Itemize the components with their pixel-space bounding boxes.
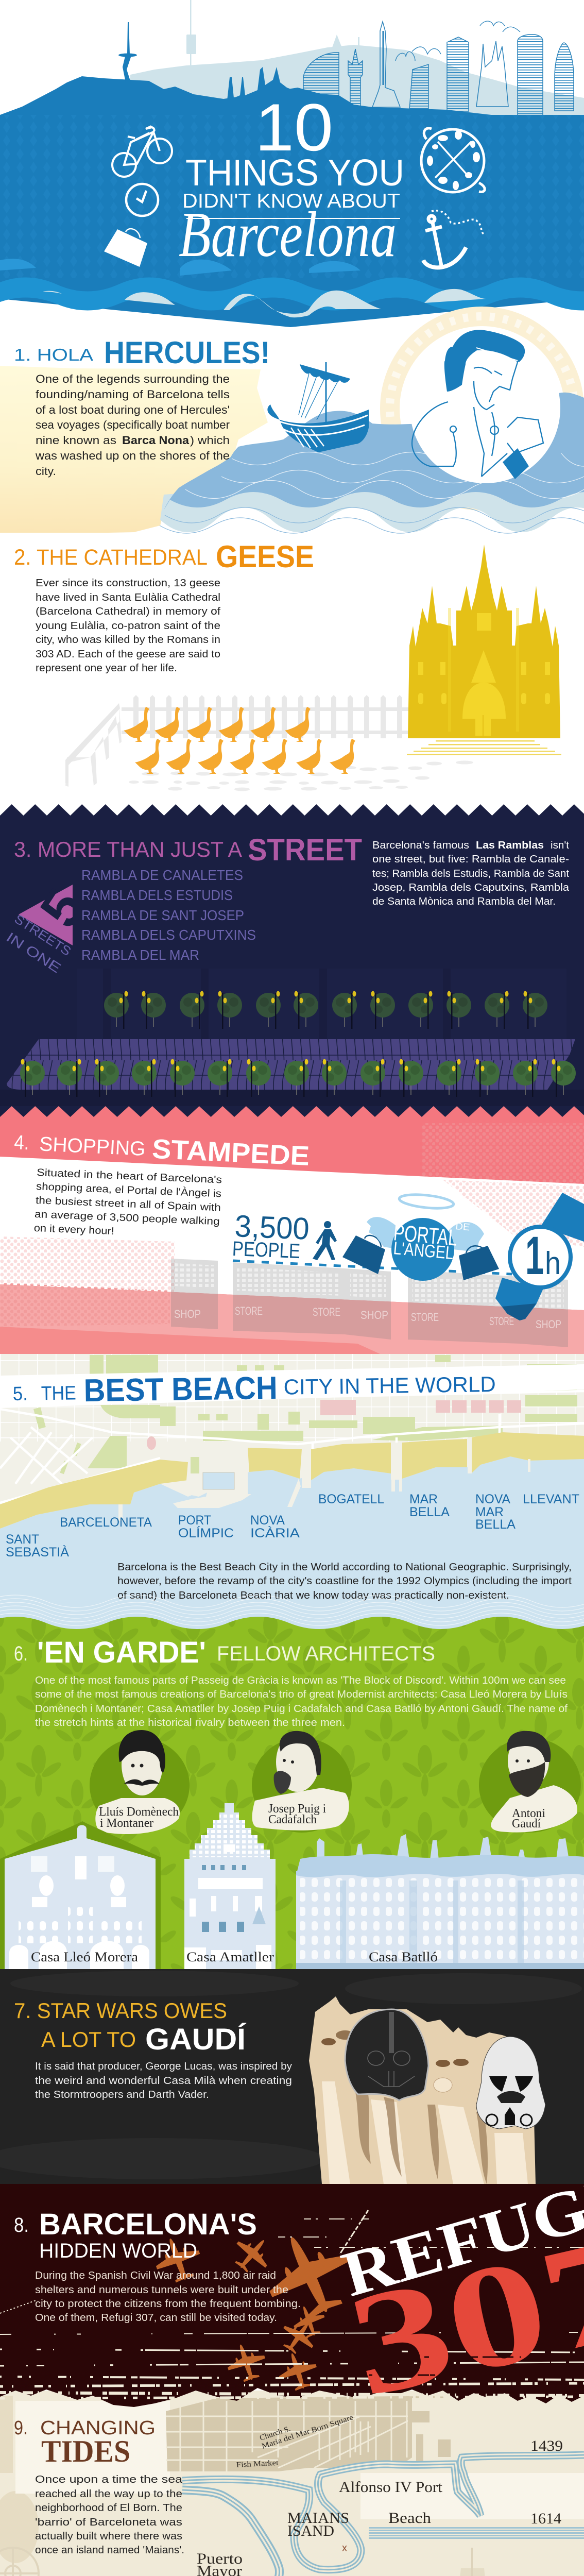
trees and lamps: near row [20,1059,576,1097]
beach labels: BELLA [409,1505,450,1519]
fence [65,695,409,787]
text block: isn't [551,840,569,851]
badge: 5 streets in one: 5 [28,878,97,938]
beaches [0,1432,584,1529]
icon: wristwatch 1h: h [545,1246,561,1281]
badge: 5 streets in one: IN ONE [4,929,64,976]
sand [0,366,268,533]
beach labels [6,1492,579,1560]
text block: once an island named 'Maians'. [35,2545,184,2556]
portrait: Lluís Domènech i Montaner: i Montaner [100,1817,153,1830]
heading: 7. Star Wars owes a lot to Gaudí: 7. STAR WARS OWES [14,1998,227,2023]
list of five ramblas [81,867,256,963]
text block [372,840,570,907]
panel: 1 Hola Hercules [0,316,584,533]
stamp: 307: 307 [335,2203,584,2428]
text block: young Eulàlia, co-patron saint of the [36,620,220,632]
beach labels: SEBASTIÀ [6,1545,69,1560]
shop signs: STORE [313,1306,340,1318]
geese: row of six [124,707,311,742]
map labels: dates and places: 1439 [530,2437,563,2454]
map labels: El Born [236,2413,354,2469]
text block: some of the most famous creations of Barcelona's trio of great Modernist architects: Casa Lleó Morera by Lluís [35,1689,568,1700]
heading: 7. Star Wars owes a lot to Gaudí [14,1998,247,2056]
icon: Greek ship [267,362,369,452]
text block [33,1167,222,1241]
road with railing [0,1039,584,1106]
water [0,1456,584,1649]
heading: 2. The Cathedral Geese: 2. THE CATHEDRAL [14,545,208,570]
cobblestones [129,760,473,791]
map labels: dates and places: Beach [388,2510,431,2527]
heading: 7. Star Wars owes a lot to Gaudí: A LOT TO [41,2027,136,2052]
white disc behind Hercules [410,333,560,483]
halo ring with Greek key [390,316,574,501]
text block: however, before the revamp of the city's coastline for the 1992 Olympics (including the import [117,1575,572,1587]
heading: 9. Changing tides: 9. [14,2417,28,2439]
text block: Barcelona is the Best Beach City in the World according to National Geographic. Surprisingly, [117,1562,572,1573]
shop buildings [171,1259,568,1347]
stamp wear [360,2357,584,2375]
text block [36,578,221,674]
beach labels: SANT [6,1532,39,1547]
title: 10 Things You Didn't Know About Barcelona: Barcelona [179,199,397,270]
heading: 6. En garde fellow architects: FELLOW ARCHITECTS [217,1642,435,1665]
shop upper windows [175,1263,564,1309]
text block [35,372,230,478]
text block: shelters and numerous tunnels were built under the [35,2284,288,2296]
portrait: Antoni Gaudí [479,1731,581,1833]
stat: 3,500 people [232,1209,310,1263]
badge: Portal de l'Àngel [391,1218,470,1281]
map labels: El Born: Maria del Mar [261,2428,311,2451]
street map of El Born [166,2396,451,2471]
grunge scratches [0,2210,584,2398]
portrait: Josep Puig i Cadafalch: Josep Puig i [268,1802,326,1816]
shop signs: STORE [235,1304,263,1317]
panel: 2 Cathedral geese [14,539,561,791]
blue mountain base [0,76,584,327]
text block: de Santa Mònica and Rambla del Mar. [372,896,556,907]
Darth Vader helmet [345,2009,428,2100]
diagonal white band [0,1157,584,1310]
photo illustration: Casa Milà chimneys [309,1996,545,2184]
text block: represent one year of her life. [36,663,177,674]
text block: the stretch hints at the historical rivalry between the three men. [35,1717,345,1728]
text block: of a lost boat during one of Hercules' [36,403,230,416]
list of five ramblas: RAMBLA DE SANT JOSEP [81,907,244,923]
heading: 9. Changing tides [14,2417,156,2468]
skyline: seagulls [396,21,520,61]
text block: Las Ramblas [476,840,544,851]
portrait: Antoni Gaudí: Antoni [512,1807,545,1820]
beach labels: ICÀRIA [250,1526,300,1540]
stat: 3,500 people: 3,500 [234,1209,310,1246]
text block: neighborhood of El Born. The [35,2502,182,2514]
icon: bag left [342,1235,385,1274]
text block: was washed up on the shores of the [35,449,230,462]
beach labels: MAR [409,1492,438,1506]
map labels: dates and places: Alfonso IV Port [339,2479,443,2496]
shop signs: SHOP [536,1318,561,1331]
coastline: 1614 [179,2490,584,2576]
beach labels: NOVA [475,1492,510,1506]
white wave lines over water [0,1595,584,1625]
geese: row of seven [135,739,355,774]
title: 10 Things You Didn't Know About Barcelona: THINGS YOU [185,152,404,194]
waves at the foot of hero [0,259,584,317]
building: Casa Batlló: Casa Batlló [369,1950,438,1964]
heading: 9. Changing tides: CHANGING [40,2417,156,2439]
text block: Ever since its construction, 13 geese [36,578,220,589]
map labels: dates and places [197,2437,564,2576]
icon: anchor with rope [423,211,485,268]
wings and halo [367,1193,484,1252]
heading band: 5. The best beach city in the world: CITY IN THE WORLD [283,1372,496,1399]
panel: 9 Changing tides (drawn beneath torn edge of panel 8) [0,2391,584,2576]
text block: (Barcelona Cathedral) in memory of [36,606,221,617]
map labels: dates and places: Puerto [197,2550,243,2567]
heading: 1. Hola Hercules!: 1. HOLA [14,345,93,364]
building: Casa Lleó Morera: Casa Lleó Morera [31,1950,139,1964]
heading: 6. En garde fellow architects [14,1636,435,1669]
panel: hero header [0,0,584,340]
text block: have lived in Santa Eulàlia Cathedral [36,592,220,603]
shop signs: SHOP [174,1308,201,1320]
heading: 8. Barcelona's hidden world [14,2208,257,2262]
heading: 9. Changing tides: TIDES [41,2434,130,2468]
skyline: outlined buildings [303,22,574,115]
heading: 1. Hola Hercules! [14,335,270,370]
beach labels: PORT [178,1513,211,1528]
text block [35,1675,568,1728]
portrait: Lluís Domènech i Montaner: Lluís Domènech [99,1805,179,1819]
badge: 5 streets in one: STREETS [12,912,74,959]
text block: city. [36,465,56,478]
text block: founding/naming of Barcelona tells [36,388,230,401]
skyline: faint tower and mountain [130,0,584,115]
text block: One of the legends surrounding the [36,372,230,385]
text block [35,2061,292,2100]
title: 10 Things You Didn't Know About Barcelona: DIDN'T KNOW ABOUT [182,190,400,212]
text block: Domènech i Montaner; Casa Amatller by Josep Puig i Cadafalch and Casa Batlló by Antoni Gaudí. The name of [35,1703,568,1715]
text block [35,2270,301,2324]
building: Casa Lleó Morera [0,1821,161,1969]
badge: 5 streets in one [4,878,97,976]
sea waves [160,393,584,533]
wave crests [43,289,486,317]
icon: bicycle [112,126,172,177]
text block: city to protect the citizens from the frequent bombing. [35,2298,301,2310]
faint ship wheel [0,2548,44,2576]
portrait: Josep Puig i Cadafalch [252,1731,352,1833]
heading: 3. More than just a street: STREET [248,833,362,867]
list of five ramblas: RAMBLA DELS CAPUTXINS [81,927,256,943]
heading: 7. Star Wars owes a lot to Gaudí: GAUDÍ [145,2023,247,2056]
icon: wristwatch 1h [495,1193,584,1320]
building: Casa Amatller [184,1803,276,1969]
text block: tes; Rambla dels Estudis, Rambla de Sant [372,868,569,879]
heading: 3. More than just a street [14,833,362,867]
illustration: Barcelona Cathedral [407,545,561,755]
cathedral steps [407,740,561,755]
text block: Barcelona's famous [372,840,469,851]
lower road [0,1284,584,1354]
shop signs [174,1304,561,1331]
panel: 6 En garde fellow architects [0,1595,584,1969]
text block: It is said that producer, George Lucas, was inspired by [35,2061,292,2072]
text block: the Stormtroopers and Darth Vader. [35,2089,209,2100]
text block: of sand) the Barceloneta Beach that we know today was practically non-existent. [117,1590,509,1601]
text block: 303 AD. Each of the geese are said to [36,649,220,660]
text block: shopping area, el Portal de l'Àngel is [36,1180,221,1199]
trees and lamps: far row [104,991,547,1029]
icon: cathedral silhouette [227,67,294,100]
bomber planes [149,2219,365,2395]
beach labels: MAR [475,1505,504,1519]
text block: During the Spanish Civil War around 1,800 air raid [35,2270,276,2281]
text block: nine known as [36,434,116,447]
title: 10 Things You Didn't Know About Barcelona: 10 [255,90,333,165]
heading band: 5. The best beach city in the world: THE [41,1382,76,1404]
shop signs: SHOP [360,1309,388,1321]
map labels: El Born: Church S. [259,2425,291,2443]
coastline: 1439 [182,2455,584,2570]
text block: One of them, Refugi 307, can still be visited today. [35,2312,277,2324]
beach labels: BELLA [475,1517,516,1532]
map roads [0,1391,584,1503]
island treasure mark: x [342,2543,347,2554]
green damask background [0,1617,584,1969]
text block: actually built where there was [35,2531,182,2542]
heading: 1. Hola Hercules!: HERCULES! [104,335,270,370]
shop signs: STORE [489,1315,514,1328]
shop signs: STORE [411,1311,439,1324]
text block: Situated in the heart of Barcelona's [37,1167,222,1185]
panel: 7 Star Wars owes a lot to Gaudí [0,1969,584,2184]
text block [117,1562,572,1601]
badge: Portal de l'Àngel: L'ÀNGEL [392,1238,454,1263]
building: Casa Amatller: Casa Amatller [186,1950,274,1964]
Stormtrooper helmet [476,2037,545,2129]
icon: walking person [313,1221,337,1260]
faint buildings [77,969,566,1041]
beach labels: OLÍMPIC [178,1526,234,1540]
text block: ) which [190,434,230,447]
title: 10 Things You Didn't Know About Barcelona [179,90,404,270]
portrait: Antoni Gaudí: Gaudí [512,1817,541,1831]
text block: Josep, Rambla dels Caputxins, Rambla [372,882,570,893]
text block: city, who was killed by the Romans in [36,634,220,646]
icon: bag right [459,1246,499,1280]
building: Casa Batlló [296,1834,584,1969]
heading band: 5. The best beach city in the world: 5. [13,1383,28,1405]
heading band: 5. The best beach city in the world [0,1364,584,1410]
portrait: Lluís Domènech i Montaner [90,1730,190,1834]
icon: paella [421,128,485,192]
heading: 3. More than just a street: 3. MORE THAN JUST A [14,837,242,861]
portrait: Josep Puig i Cadafalch: Cadafalch [268,1813,317,1826]
text block: one street, but five: Rambla de Canale- [372,854,569,865]
icon: shopping bag [104,229,147,267]
text block: on it every hour! [33,1223,114,1237]
map labels: dates and places: MAIANS [287,2510,349,2527]
heading: 6. En garde fellow architects: 'EN GARDE' [37,1636,206,1669]
heading: 8. Barcelona's hidden world: 8. [14,2214,29,2236]
beach labels: BARCELONETA [60,1515,152,1530]
icon: clock [126,184,158,216]
map labels: dates and places: 1614 [530,2510,561,2527]
beach labels: BOGATELL [318,1492,384,1506]
icon: Collserola tower [118,22,137,82]
text block: 'barrio' of Barceloneta was [35,2517,182,2528]
badge: Portal de l'Àngel: DE [455,1221,470,1233]
heading: 2. The Cathedral Geese [14,539,314,574]
text block [35,2474,184,2556]
heading: 4. Shopping stampede: SHOPPING [39,1133,146,1160]
port and piers [118,1437,530,1521]
heading: 4. Shopping stampede: STAMPEDE [151,1134,310,1172]
heading: 4. Shopping stampede [13,1127,310,1172]
heading: 6. En garde fellow architects: 6. [14,1642,28,1665]
panel: 8 Barcelona's hidden world [0,2165,584,2428]
faint ship [456,2548,489,2576]
list of five ramblas: RAMBLA DELS ESTUDIS [81,887,233,903]
heading band: 5. The best beach city in the world: BEST BEACH [83,1370,278,1409]
text block: Barca Nona [122,434,190,447]
heading: 2. The Cathedral Geese: GEESE [216,539,314,574]
beach labels: LLEVANT [523,1492,579,1506]
text block: an average of 3,500 people walking [35,1209,220,1227]
text block: One of the most famous parts of Passeig de Gràcia is known as 'The Block of Discord'. Within 100m we can see [35,1675,566,1686]
dashed route [233,1261,512,1274]
beach labels: NOVA [250,1513,285,1528]
list of five ramblas: RAMBLA DEL MAR [81,947,199,963]
parchment stains [0,2396,584,2576]
map parks [33,1355,577,1474]
text block: the busiest street in all of Spain with [36,1195,221,1213]
icon: wristwatch 1h: 1 [525,1226,544,1286]
text block: the weird and wonderful Casa Milà when creating [35,2075,292,2087]
badge: Portal de l'Àngel: PORTAL [392,1220,458,1251]
panel: 5 Best beach city map [0,1354,584,1649]
map pink plots [147,1400,521,1450]
stat: 3,500 people: PEOPLE [232,1238,301,1263]
map labels: El Born: Born Square [310,2413,354,2435]
heading: 8. Barcelona's hidden world: BARCELONA'S [39,2208,257,2241]
panel: 4 Shopping stampede [0,1106,584,1354]
figure: Hercules [412,330,543,479]
map labels: dates and places: ISAND [287,2522,334,2539]
panel: 3 More than just a street [0,804,584,1106]
heading: 8. Barcelona's hidden world: HIDDEN WORLD [39,2240,197,2262]
map labels: El Born: Fish Market [236,2459,279,2469]
text block: reached all the way up to the [35,2488,182,2500]
text block: Once upon a time the sea [35,2474,183,2485]
list of five ramblas: RAMBLA DE CANALETES [81,867,243,883]
heading: 4. Shopping stampede: 4. [14,1131,30,1154]
text block: sea voyages (specifically boat number [36,418,230,431]
